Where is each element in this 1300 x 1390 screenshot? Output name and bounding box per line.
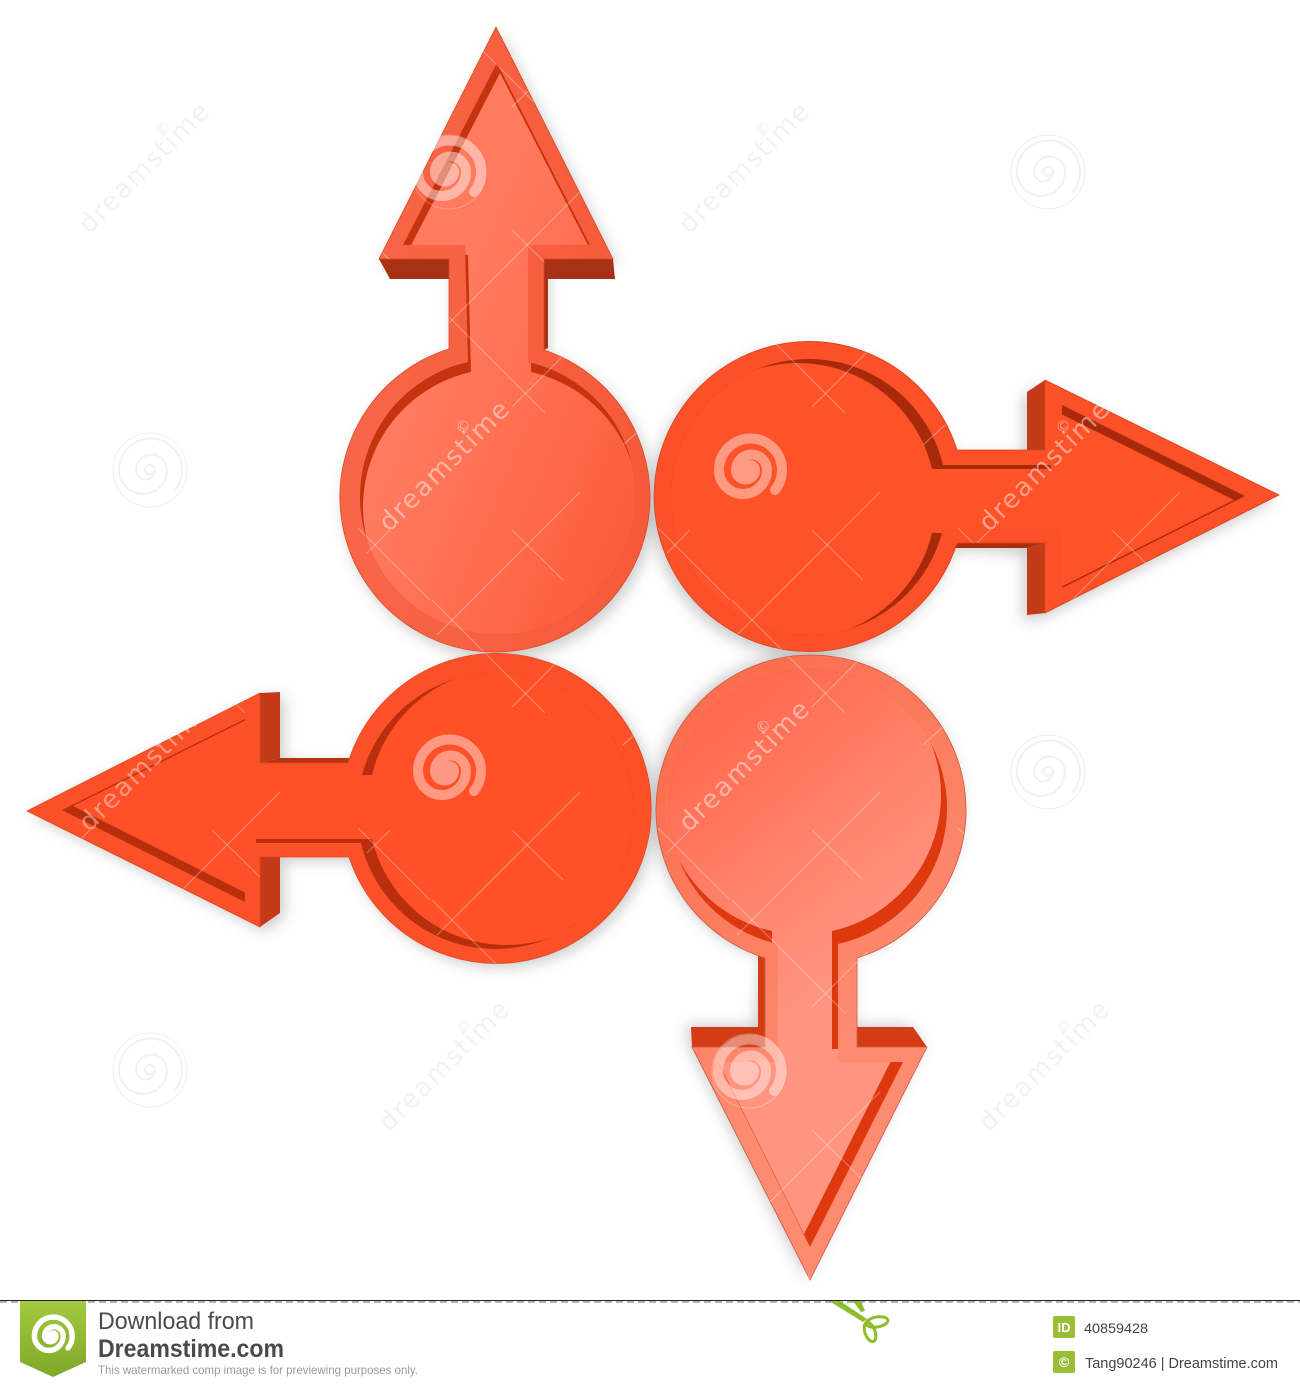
spiral: left circle xyxy=(418,740,481,795)
image credit row: Tang90246 | Dreamstime.com xyxy=(1085,1355,1278,1372)
left arrow rim xyxy=(27,653,651,963)
wordmark on down circle: dreamstime xyxy=(673,695,816,838)
left arrow side faces xyxy=(260,692,280,927)
spiral: right circle xyxy=(719,438,782,494)
wordmark top middle: dreamstime xyxy=(673,97,816,240)
footer download text: Download from xyxy=(98,1308,254,1335)
down arrow recess wall xyxy=(669,669,947,1247)
image id row: 40859428 xyxy=(1084,1320,1148,1336)
footer download text xyxy=(98,1308,418,1377)
right arrow floor xyxy=(660,363,1234,639)
spiral: middle left xyxy=(113,433,187,507)
footer cut line xyxy=(0,1300,1300,1302)
spiral: lower right xyxy=(1011,735,1085,809)
image id row xyxy=(1053,1316,1148,1338)
footer download text: This watermarked comp image is for previewing purposes only. xyxy=(98,1363,418,1377)
wordmark bottom right: dreamstime xyxy=(973,995,1116,1138)
down arrow side faces xyxy=(691,955,927,1047)
wordmark on up circle: © xyxy=(452,415,475,438)
spiral: top right xyxy=(1011,135,1085,209)
wordmark on down circle: © xyxy=(752,715,775,738)
up arrow floor xyxy=(363,73,639,645)
up arrow watermark lines xyxy=(340,27,650,652)
wordmark on right arrow: dreamstime xyxy=(973,395,1116,538)
wordmark bottom middle: dreamstime xyxy=(373,995,516,1138)
spiral: bottom left xyxy=(113,1033,187,1107)
arrow: down xyxy=(656,655,966,1280)
image credit row: © xyxy=(1059,1354,1070,1370)
wordmark on left arrow: © xyxy=(152,715,175,738)
right arrow shaft underside xyxy=(955,543,1045,548)
footer download text: Dreamstime.com xyxy=(98,1335,284,1363)
arrow: right xyxy=(654,341,1279,651)
wordmark bottom middle: © xyxy=(452,1015,475,1038)
wordmark top left: dreamstime xyxy=(73,97,216,240)
wordmark on up circle: dreamstime xyxy=(373,395,516,538)
right arrow rim xyxy=(654,341,1279,651)
wordmark on left arrow: dreamstime xyxy=(73,695,216,838)
left arrow watermark lines xyxy=(27,653,651,963)
right arrow watermark lines xyxy=(654,341,1279,651)
spiral: top centre xyxy=(412,135,486,209)
image id row: ID xyxy=(1058,1320,1070,1335)
left arrow shaft topside xyxy=(260,758,350,763)
left arrow floor xyxy=(73,669,644,945)
right arrow recess wall xyxy=(671,359,1245,635)
wordmark top left: © xyxy=(152,117,175,140)
icon: green scissors xyxy=(829,1301,889,1343)
right arrow side faces xyxy=(1027,380,1045,615)
spiral: down arrow xyxy=(712,1034,786,1108)
up arrow side faces xyxy=(379,259,615,350)
image credit row xyxy=(1053,1351,1278,1373)
arrow: left xyxy=(27,653,651,963)
up arrow recess wall xyxy=(360,63,636,635)
down arrow floor xyxy=(663,656,941,1234)
left arrow recess wall xyxy=(62,673,633,949)
watermark spirals xyxy=(113,135,1085,1108)
down arrow rim xyxy=(656,655,966,1280)
arrow: up xyxy=(340,27,650,652)
watermark wordmarks xyxy=(73,97,1116,1138)
up arrow rim xyxy=(340,27,650,652)
wordmark bottom right: © xyxy=(1052,1015,1075,1038)
icon: green ribbon logo xyxy=(20,1301,86,1377)
down arrow watermark lines xyxy=(656,655,966,1280)
wordmark top middle: © xyxy=(752,117,775,140)
wordmark on right arrow: © xyxy=(1052,415,1075,438)
